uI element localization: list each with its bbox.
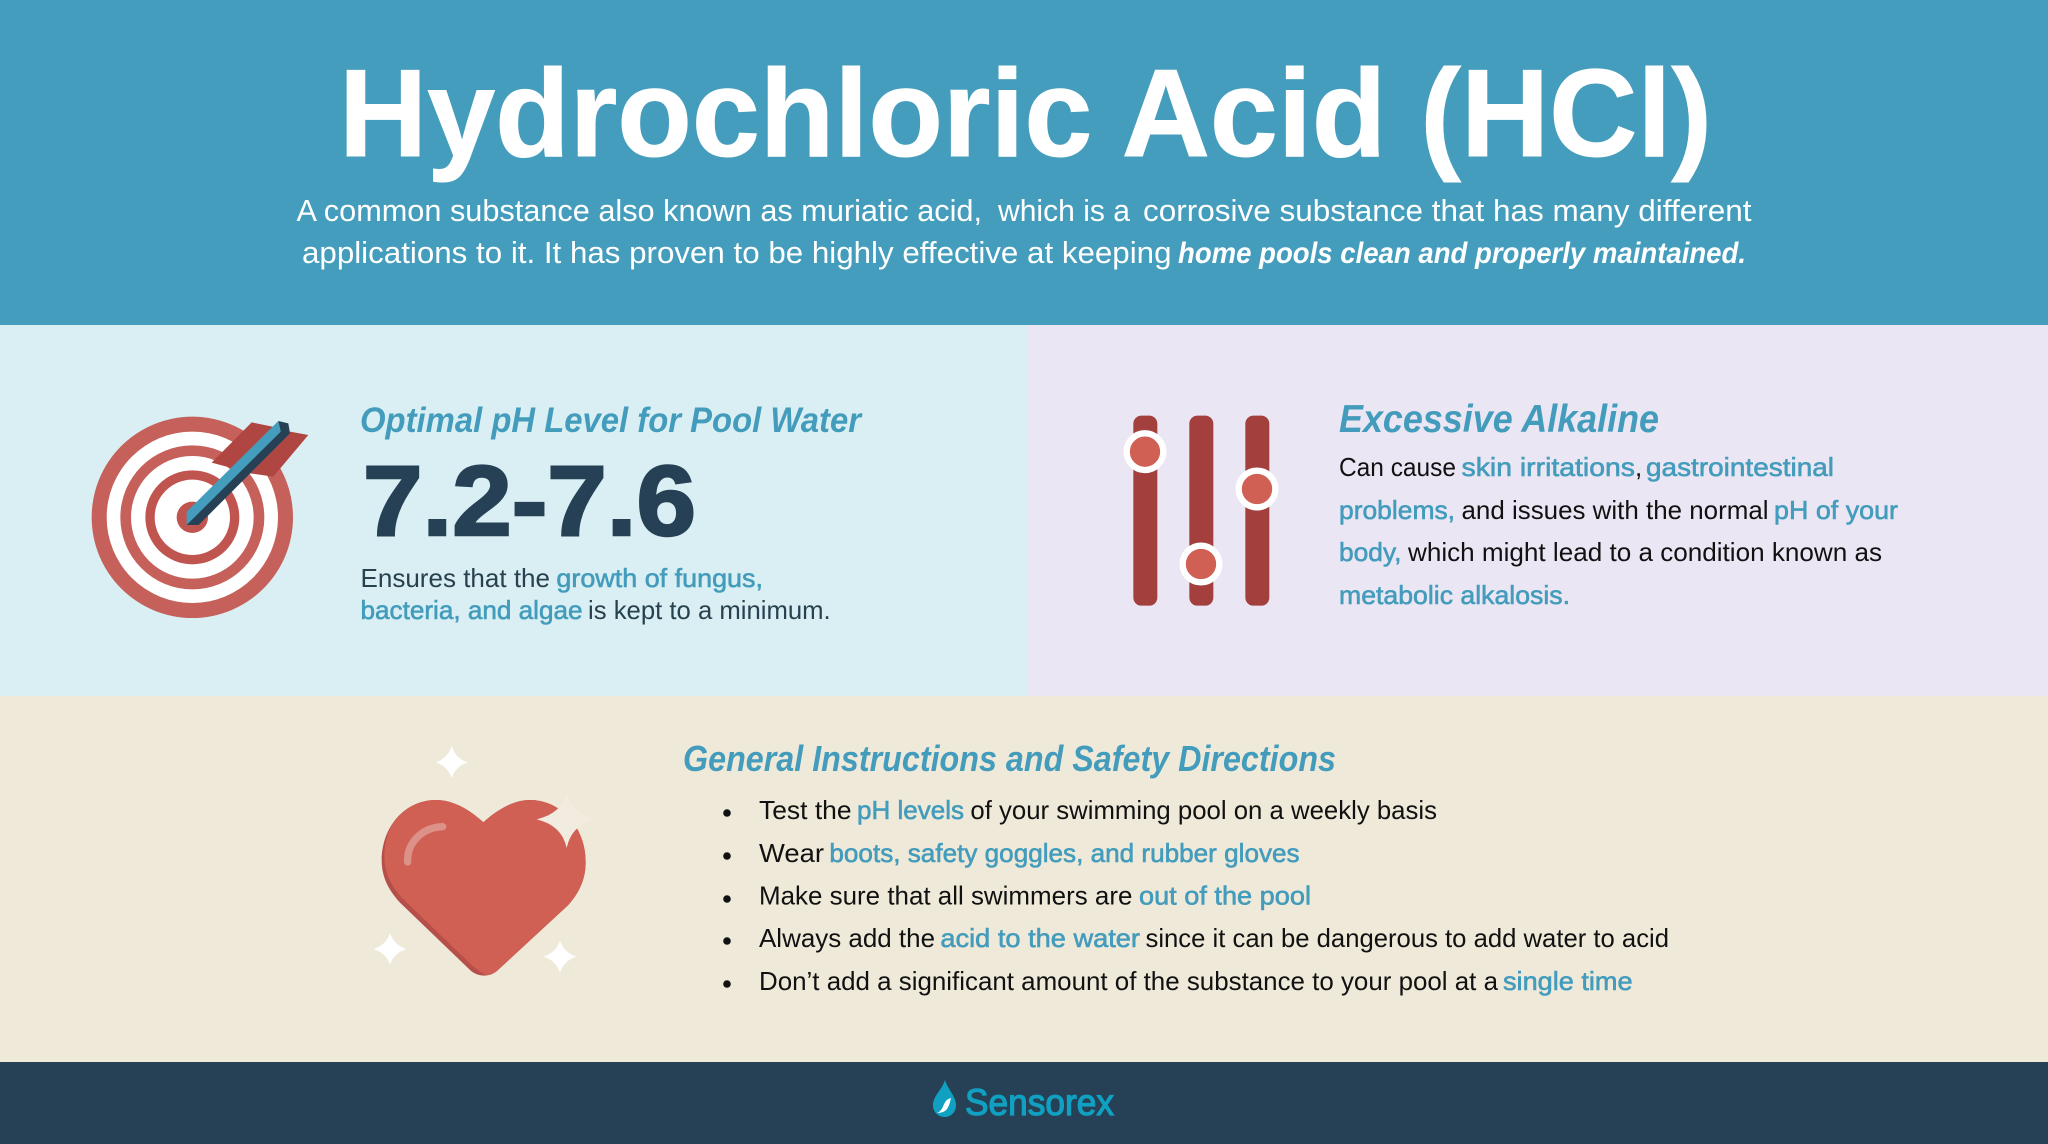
description text: is kept to a minimum. bbox=[588, 595, 831, 625]
description text: , bbox=[1635, 452, 1642, 482]
subtitle text: home pools clean and properly maintained. bbox=[1178, 237, 1746, 270]
icon: sliders bbox=[1127, 416, 1275, 606]
bullet list bbox=[723, 795, 1669, 996]
subtitle text: which is a bbox=[997, 193, 1131, 228]
description text: growth of fungus, bbox=[556, 563, 763, 593]
description text: gastrointestinal bbox=[1646, 452, 1834, 482]
big number: pH range: 7.2-7.6 bbox=[363, 445, 696, 556]
bullet list: of your swimming pool on a weekly basis bbox=[970, 795, 1437, 825]
panel: optimal pH level bbox=[0, 325, 1028, 696]
bullet list: out of the pool bbox=[1139, 880, 1311, 910]
icon: target with arrow bbox=[92, 417, 308, 618]
description text: Can cause bbox=[1339, 452, 1456, 482]
description text: skin irritations bbox=[1462, 452, 1635, 482]
description text bbox=[1339, 452, 1898, 610]
icon: heart with sparkles bbox=[374, 746, 594, 976]
bullet list: pH levels bbox=[857, 795, 964, 825]
description text: metabolic alkalosis. bbox=[1339, 580, 1570, 610]
subtitle text bbox=[296, 193, 1752, 270]
panel: general instructions bbox=[0, 696, 2048, 1062]
icon: Sensorex water drop logo bbox=[933, 1080, 956, 1117]
description text: problems, bbox=[1339, 495, 1455, 525]
logo wordmark: Sensorex bbox=[965, 1082, 1114, 1123]
description text bbox=[360, 563, 831, 625]
bullet list: single time bbox=[1503, 966, 1633, 996]
subtitle text: A common substance also known as muriatic acid, bbox=[296, 193, 982, 228]
panel: header bbox=[0, 0, 2048, 325]
subtitle text: applications to it. It has proven to be highly effective at keeping bbox=[302, 235, 1172, 270]
description text: body, bbox=[1339, 537, 1402, 567]
bullet list: since it can be dangerous to add water to acid bbox=[1146, 923, 1669, 953]
bullet list: Test the bbox=[759, 795, 852, 825]
description text: which might lead to a condition known as bbox=[1407, 537, 1882, 567]
bullet list: boots, safety goggles, and rubber gloves bbox=[829, 838, 1300, 868]
heading: general instructions: General Instructions and Safety Directions bbox=[683, 738, 1336, 779]
bullet list: Always add the bbox=[759, 923, 935, 953]
heading: optimal pH level: Optimal pH Level for Pool Water bbox=[360, 401, 863, 440]
description text: Ensures that the bbox=[360, 563, 550, 593]
title: Hydrochloric Acid (HCl) bbox=[339, 45, 1712, 183]
description text: pH of your bbox=[1774, 495, 1898, 525]
bullet list: Make sure that all swimmers are bbox=[759, 880, 1132, 910]
subtitle text: corrosive substance that has many different bbox=[1143, 193, 1752, 228]
panel: footer bbox=[0, 1062, 2048, 1144]
bullet list: Wear bbox=[759, 838, 824, 868]
description text: bacteria, and algae bbox=[360, 595, 582, 625]
description text: and issues with the normal bbox=[1462, 495, 1768, 525]
bullet list: acid to the water bbox=[940, 923, 1140, 953]
bullet list: Don’t add a significant amount of the substance to your pool at a bbox=[759, 966, 1499, 996]
panel: excessive alkaline bbox=[1028, 325, 2048, 696]
heading: excessive alkaline: Excessive Alkaline bbox=[1339, 398, 1659, 441]
